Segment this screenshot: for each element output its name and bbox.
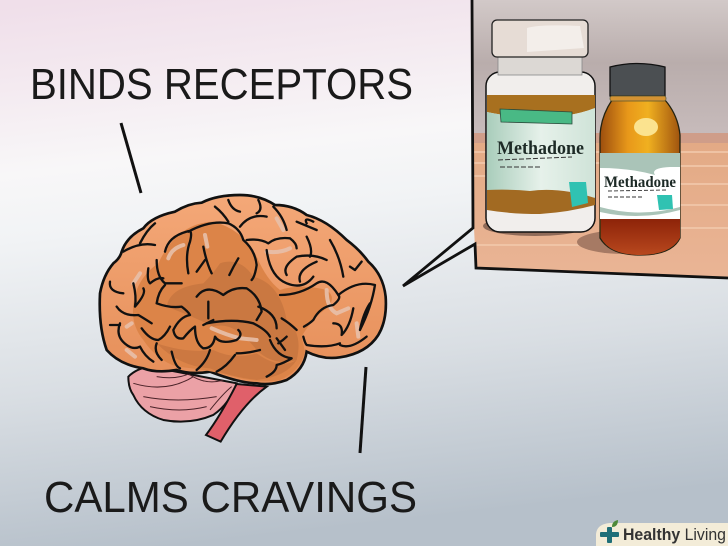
pointer line: binds receptors — [121, 123, 141, 193]
heading: calms cravings: CALMS CRAVINGS — [44, 473, 417, 522]
brain illustration — [100, 195, 386, 442]
amber bottle — [600, 64, 680, 255]
brainstem — [206, 384, 267, 442]
pointer line: calms cravings — [360, 367, 366, 453]
white bottle — [486, 20, 595, 232]
darker inner lobe shading — [133, 222, 332, 381]
cerebellum — [128, 367, 237, 422]
white bottle: Methadone — [497, 138, 584, 159]
callout panel: methadone bottles — [403, 0, 728, 286]
panel background — [470, 0, 728, 283]
watermark background — [596, 523, 728, 546]
highlights — [127, 218, 358, 357]
sulci — [110, 200, 375, 377]
amber bottle: Methadone — [604, 174, 676, 191]
heading: binds receptors: BINDS RECEPTORS — [30, 60, 413, 109]
watermark: Healthy Living — [596, 520, 728, 546]
cerebrum — [100, 195, 386, 384]
callout outline and tail — [403, 0, 728, 286]
watermark text: Healthy Living — [623, 526, 726, 544]
icon: green cross — [600, 520, 619, 543]
